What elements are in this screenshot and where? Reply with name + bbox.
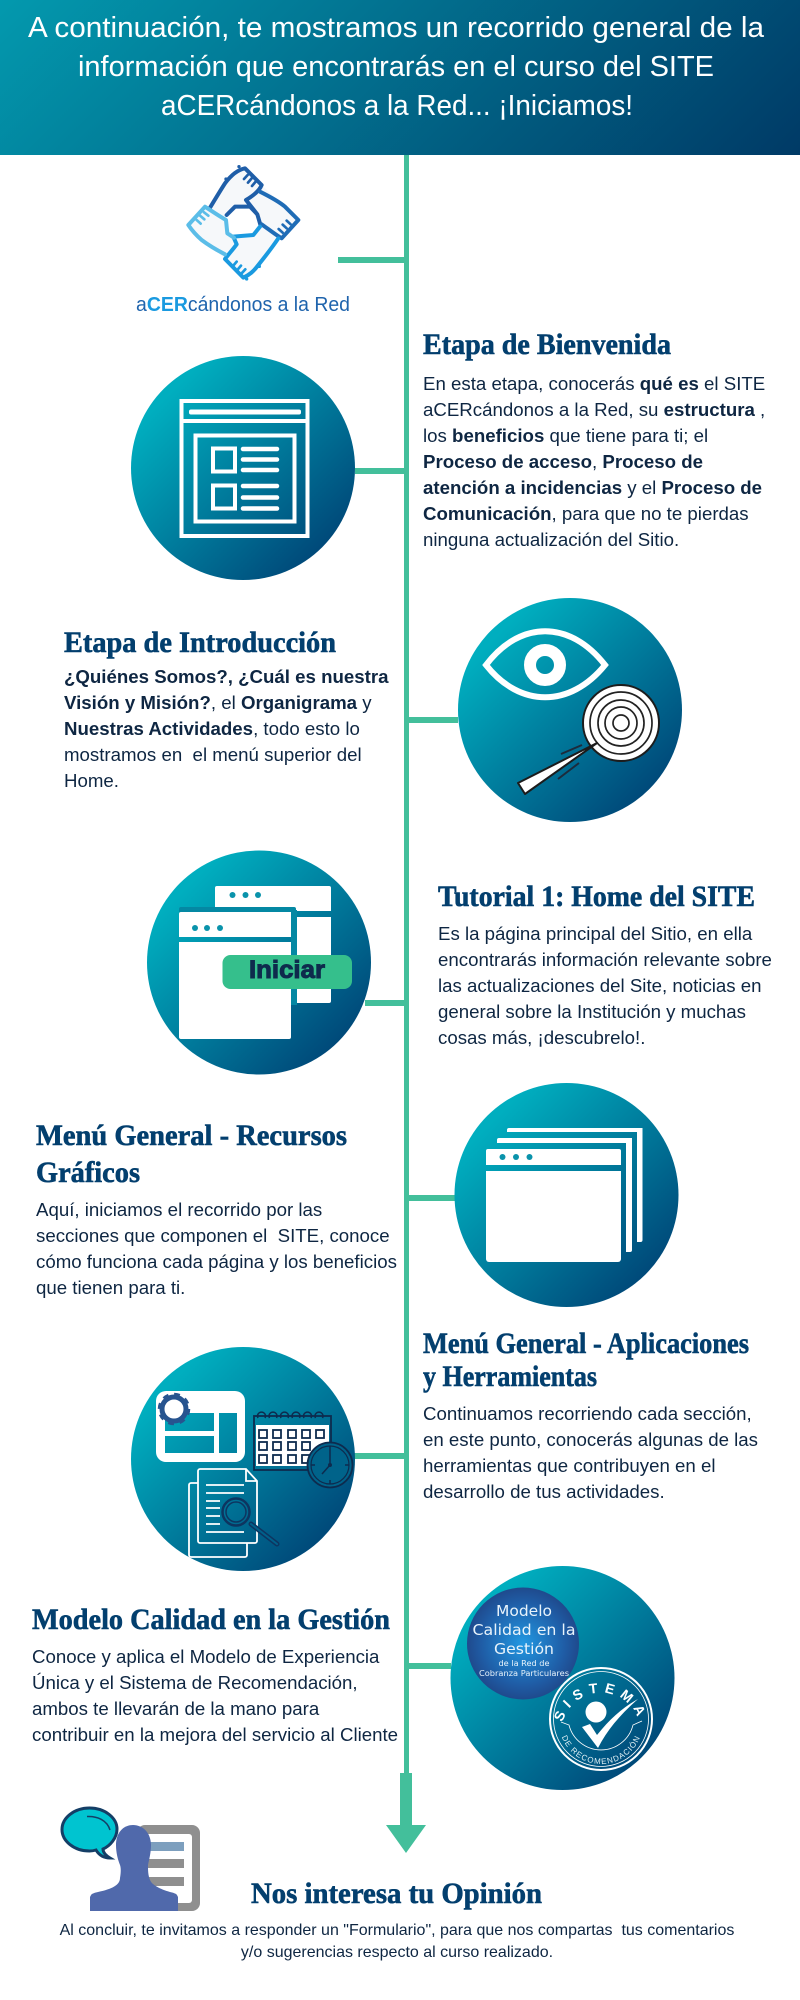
text block: Tutorial 1: general sobre la Institución y muchas xyxy=(438,1001,746,1022)
logo: aCERcándonos a la Red xyxy=(136,165,350,316)
text block: Etapa de Introducción: Visión y Misión?, el Organigrama y xyxy=(64,692,372,713)
text block: Menú General Aplicaciones y Herramientas: Continuamos recorriendo cada sección, xyxy=(423,1403,752,1424)
icon: quality model and recommendation seal circle xyxy=(450,1566,674,1790)
connector: recursos xyxy=(409,1195,455,1201)
logo: aCERcándonos a la Red: aCERcándonos a la Red xyxy=(136,294,350,316)
text block: Menú General Recursos Gráficos: Menú General - Recursos xyxy=(36,1119,347,1152)
text block: Menú General Aplicaciones y Herramientas: desarrollo de tus actividades. xyxy=(423,1481,665,1502)
text block: Etapa de Bienvenida: Comunicación, para que no te pierdas xyxy=(423,503,749,524)
icon: browser windows with start button circle: Iniciar xyxy=(249,956,325,984)
connector: introducción xyxy=(409,717,458,723)
icon: browser windows with start button circle xyxy=(147,850,371,1074)
text block: Etapa de Introducción: Nuestras Actividades, todo esto lo xyxy=(64,718,360,739)
text block: Etapa de Introducción: ¿Quiénes Somos?, ¿Cuál es nuestra xyxy=(64,666,389,687)
header banner: aCERcándonos a la Red... ¡Iniciamos! xyxy=(161,90,633,122)
header banner: A continuación, te mostramos un recorrido general de la xyxy=(28,12,765,44)
text block: Etapa de Bienvenida: los beneficios que tiene para ti; el xyxy=(423,425,708,446)
text block: Etapa de Introducción xyxy=(64,626,389,791)
icon: eye and target circle xyxy=(458,598,682,822)
text block: Etapa de Introducción: Etapa de Introducción xyxy=(64,626,336,659)
connector: herramientas xyxy=(354,1453,404,1459)
icon: stacked windows circle xyxy=(454,1083,678,1307)
connector: bienvenida xyxy=(355,468,404,474)
text block: Modelo Calidad en la Gestión: Conoce y aplica el Modelo de Experiencia xyxy=(32,1646,380,1667)
text block: Tutorial 1: Es la página principal del Sitio, en ella xyxy=(438,923,753,944)
quality model badge: Cobranza Particulares xyxy=(479,1669,569,1678)
recommendation seal xyxy=(549,1667,653,1771)
text block: Menú General Recursos Gráficos: Gráficos xyxy=(36,1156,140,1189)
text block: Etapa de Bienvenida: ninguna actualización del Sitio. xyxy=(423,529,679,550)
quality model badge: de la Red de xyxy=(498,1659,550,1668)
text block: Modelo Calidad en la Gestión: contribuir en la mejora del servicio al Cliente xyxy=(32,1724,398,1745)
arrow: timeline end xyxy=(386,1773,426,1853)
text block: Etapa de Bienvenida: Etapa de Bienvenida xyxy=(423,328,671,361)
icon: tools circle xyxy=(131,1347,355,1571)
calendar and clock xyxy=(254,1412,352,1488)
text block: Menú General Aplicaciones y Herramientas: y Herramientas xyxy=(423,1360,597,1393)
documents with magnifier xyxy=(189,1469,277,1557)
text block: Nos interesa tu Opinión: Nos interesa tu Opinión xyxy=(251,1877,542,1910)
dashboard panel with gear xyxy=(156,1391,245,1462)
text block: Nos interesa tu Opinión: Al concluir, te invitamos a responder un "Formulario", para que nos compartas tus comentarios xyxy=(60,1922,734,1939)
text block: Tutorial 1 xyxy=(438,880,772,1048)
text block: Etapa de Bienvenida: Proceso de acceso, Proceso de xyxy=(423,451,703,472)
connector: tutorial xyxy=(365,1000,404,1006)
text block: Tutorial 1: cosas más, ¡descubrelo!. xyxy=(438,1027,645,1048)
text block: Menú General Aplicaciones y Herramientas: herramientas que contribuyen en el xyxy=(423,1455,715,1476)
quality model badge: Calidad en la xyxy=(472,1621,576,1639)
recommendation seal: SISTEMA xyxy=(554,1683,644,1721)
text block: Modelo Calidad en la Gestión: Modelo Calidad en la Gestión xyxy=(32,1603,390,1636)
header banner xyxy=(0,0,800,155)
text block: Menú General Aplicaciones y Herramientas: Menú General - Aplicaciones xyxy=(423,1327,749,1360)
quality model badge xyxy=(467,1588,579,1700)
text block: Modelo Calidad en la Gestión xyxy=(32,1603,398,1745)
text block: Nos interesa tu Opinión xyxy=(60,1877,734,1961)
timeline vertical line xyxy=(404,155,409,1775)
text block: Menú General Aplicaciones y Herramientas: en este punto, conocerás algunas de las xyxy=(423,1429,758,1450)
text block: Etapa de Introducción: Home. xyxy=(64,770,119,791)
text block: Menú General Recursos Gráficos: cómo funciona cada página y los beneficios xyxy=(36,1251,397,1272)
text block: Etapa de Bienvenida: aCERcándonos a la Red, su estructura , xyxy=(423,399,765,420)
text block: Menú General Recursos Gráficos: secciones que componen el SITE, conoce xyxy=(36,1225,390,1246)
text block: Tutorial 1: las actualizaciones del Site, noticias en xyxy=(438,975,762,996)
text block: Etapa de Introducción: mostramos en el menú superior del xyxy=(64,744,362,765)
text block: Tutorial 1: Tutorial 1: Home del SITE xyxy=(438,880,755,913)
recommendation seal: DE RECOMENDACIÓN xyxy=(562,1735,640,1764)
text block: Modelo Calidad en la Gestión: ambos te llevarán de la mano para xyxy=(32,1698,320,1719)
icon: page layout circle xyxy=(131,356,355,580)
text block: Menú General Aplicaciones y Herramientas xyxy=(423,1327,758,1502)
icon: opinion form with person and speech bubble xyxy=(62,1808,200,1911)
header banner: información que encontrarás en el curso del SITE xyxy=(78,51,714,83)
text block: Menú General Recursos Gráficos: Aquí, iniciamos el recorrido por las xyxy=(36,1199,322,1220)
text block: Nos interesa tu Opinión: y/o sugerencias respecto al curso realizado. xyxy=(241,1944,553,1961)
text block: Menú General Recursos Gráficos: que tienen para ti. xyxy=(36,1277,185,1298)
connector: logo xyxy=(338,257,404,263)
connector: modelo xyxy=(409,1663,451,1669)
quality model badge: Modelo xyxy=(496,1602,552,1620)
text block: Tutorial 1: encontrarás información relevante sobre xyxy=(438,949,772,970)
text block: Etapa de Bienvenida: atención a incidencias y el Proceso de xyxy=(423,477,762,498)
quality model badge: Gestión xyxy=(494,1640,554,1658)
text block: Etapa de Bienvenida: En esta etapa, conocerás qué es el SITE xyxy=(423,373,765,394)
text block: Modelo Calidad en la Gestión: Única y el Sistema de Recomendación, xyxy=(32,1672,358,1693)
text block: Etapa de Bienvenida xyxy=(423,328,765,550)
text block: Menú General Recursos Gráficos xyxy=(36,1119,397,1298)
